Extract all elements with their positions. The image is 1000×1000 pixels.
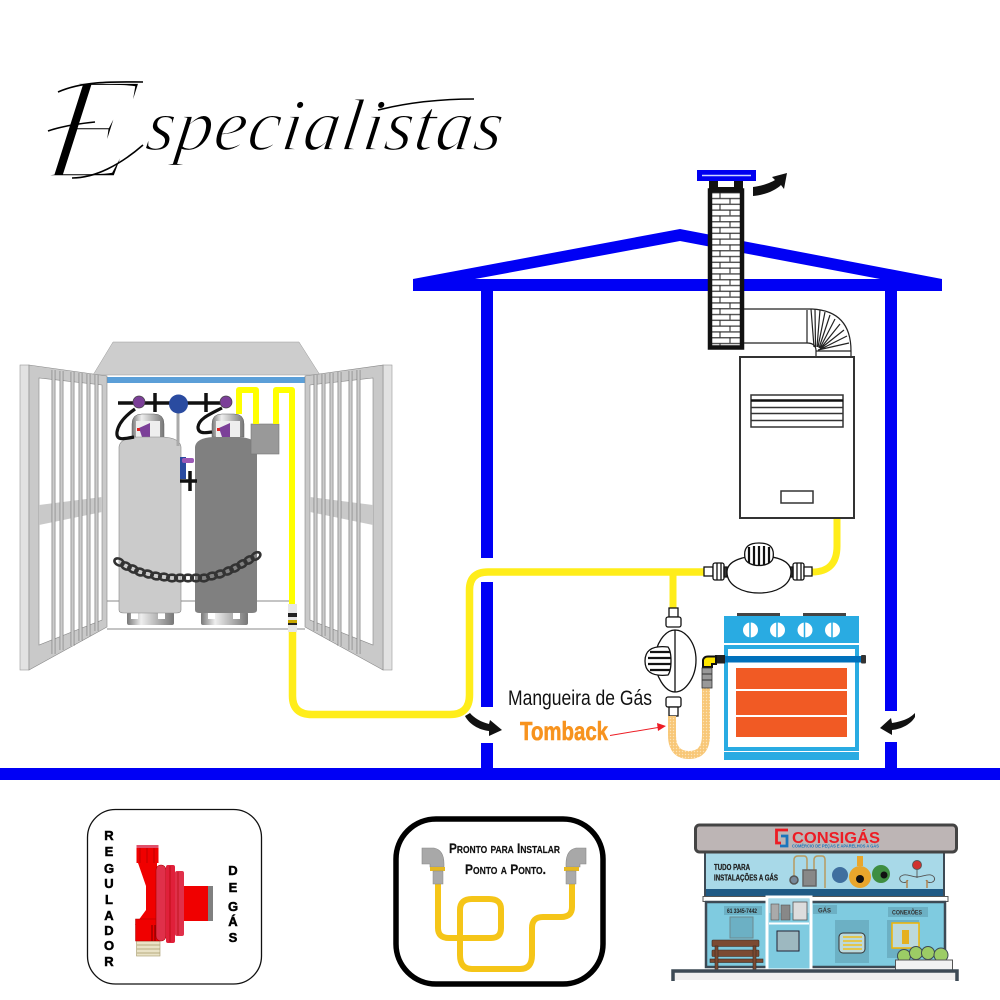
gas bar [722,656,862,662]
window label: gás [813,905,837,914]
title: specialistas [142,85,510,167]
left door [20,365,107,670]
right elbow fitting [564,848,586,884]
window poster: hose [835,920,869,963]
vertical label: regulador: L [105,892,113,907]
upper banner [705,852,944,896]
label: tomback: Tomback [520,716,608,746]
banner text: TUDO PARA [714,863,750,872]
yellow riser pipes [239,390,292,604]
control panel [724,616,859,643]
stove body [726,647,857,749]
vent grille [751,395,843,427]
door [767,897,811,970]
vertical label: de gás: D [228,863,238,878]
chimney [697,170,756,348]
house structure [0,229,1000,780]
hose elbow fitting [702,656,716,688]
vertical label: regulador: R [104,828,114,843]
pavement [673,971,957,981]
vertical label: regulador: U [104,876,114,891]
chimney cap [697,170,756,181]
caption: Ponto a Ponto. [465,861,546,877]
vertical label: de gás: E [229,880,238,895]
vertical label: de gás: S [229,930,238,945]
banner meter icon [790,856,825,888]
chain [113,551,262,582]
panel: regulador de gás [88,810,262,984]
gas pipe [292,518,837,714]
logo mark [776,830,788,846]
floor line [0,768,1000,780]
brick stack [710,190,742,348]
shutoff valve [288,604,297,632]
flower planter [896,946,952,970]
banner pigtails [900,860,935,888]
vertical label: regulador [104,828,114,969]
vertical label: de gás [228,863,238,945]
banner regulators [832,856,890,888]
water heater [740,357,854,518]
vertical label: de gás: Á [228,914,238,929]
right wall [885,291,897,769]
flue duct [744,309,851,357]
awning rail [703,896,948,902]
caption: Pronto para Instalar [449,840,561,856]
panel: pronto para instalar [396,819,603,984]
cabinet interior [107,377,305,629]
vertical gas regulator [645,608,696,716]
vertical label: regulador: G [104,861,114,876]
right door [305,365,392,670]
left elbow fitting [422,848,445,884]
vertical label: regulador: D [104,923,114,938]
yellow corrugated tube [438,884,572,969]
window sign: phone: 61 3345-7442 [727,909,758,915]
vertical label: regulador: O [104,938,114,953]
shop front windows [706,902,945,967]
left wall [481,291,493,769]
vertical label: de gás: G [228,899,238,914]
banner text: INSTALAÇÕES A GÁS [714,874,778,882]
horizontal gas regulator [704,543,812,593]
left gas cylinder [119,414,181,625]
window sign: phone [724,906,762,915]
brand name: CONSIGÁS [792,830,880,847]
stove base [724,752,859,760]
right gas cylinder [195,414,257,625]
oven door [736,668,847,737]
sign board [696,825,956,852]
knobs [743,622,840,638]
brand tagline: COMÉRCIO DE PEÇAS E APARELHOS A GÁS [792,842,879,848]
label: mangueira de gás: Mangueira de Gás [508,687,652,710]
gas cabinet [20,342,392,670]
arrow: chimney exhaust [753,173,787,196]
gas meter box [251,424,279,454]
window poster: left [730,917,753,938]
chimney supports [709,181,743,190]
arrow: right vent [880,713,915,735]
manifold [117,393,232,491]
burners [737,613,846,616]
illustration: consigás shop [673,825,957,981]
display slot [781,491,813,503]
title [33,47,516,211]
window poster: connections [887,920,919,958]
window label: conexões: CONEXÕES [892,910,922,916]
caption [449,840,561,877]
vertical label: regulador: E [105,844,114,859]
arrow: left vent [465,713,502,736]
roof [413,229,942,279]
vertical label: regulador: R [104,954,114,969]
window label: gás: GÁS [818,908,831,914]
icon: red regulator [135,845,213,956]
tomback flexible hose [672,688,706,755]
window label: conexões [888,907,928,917]
bench [710,940,763,970]
vertical label: regulador: A [104,908,114,923]
banner text [714,863,778,882]
arrow: tomback to hose [610,723,666,736]
title: E [33,47,149,211]
ceiling beam [413,279,942,291]
stove [715,613,866,760]
cabinet roof [93,342,320,375]
